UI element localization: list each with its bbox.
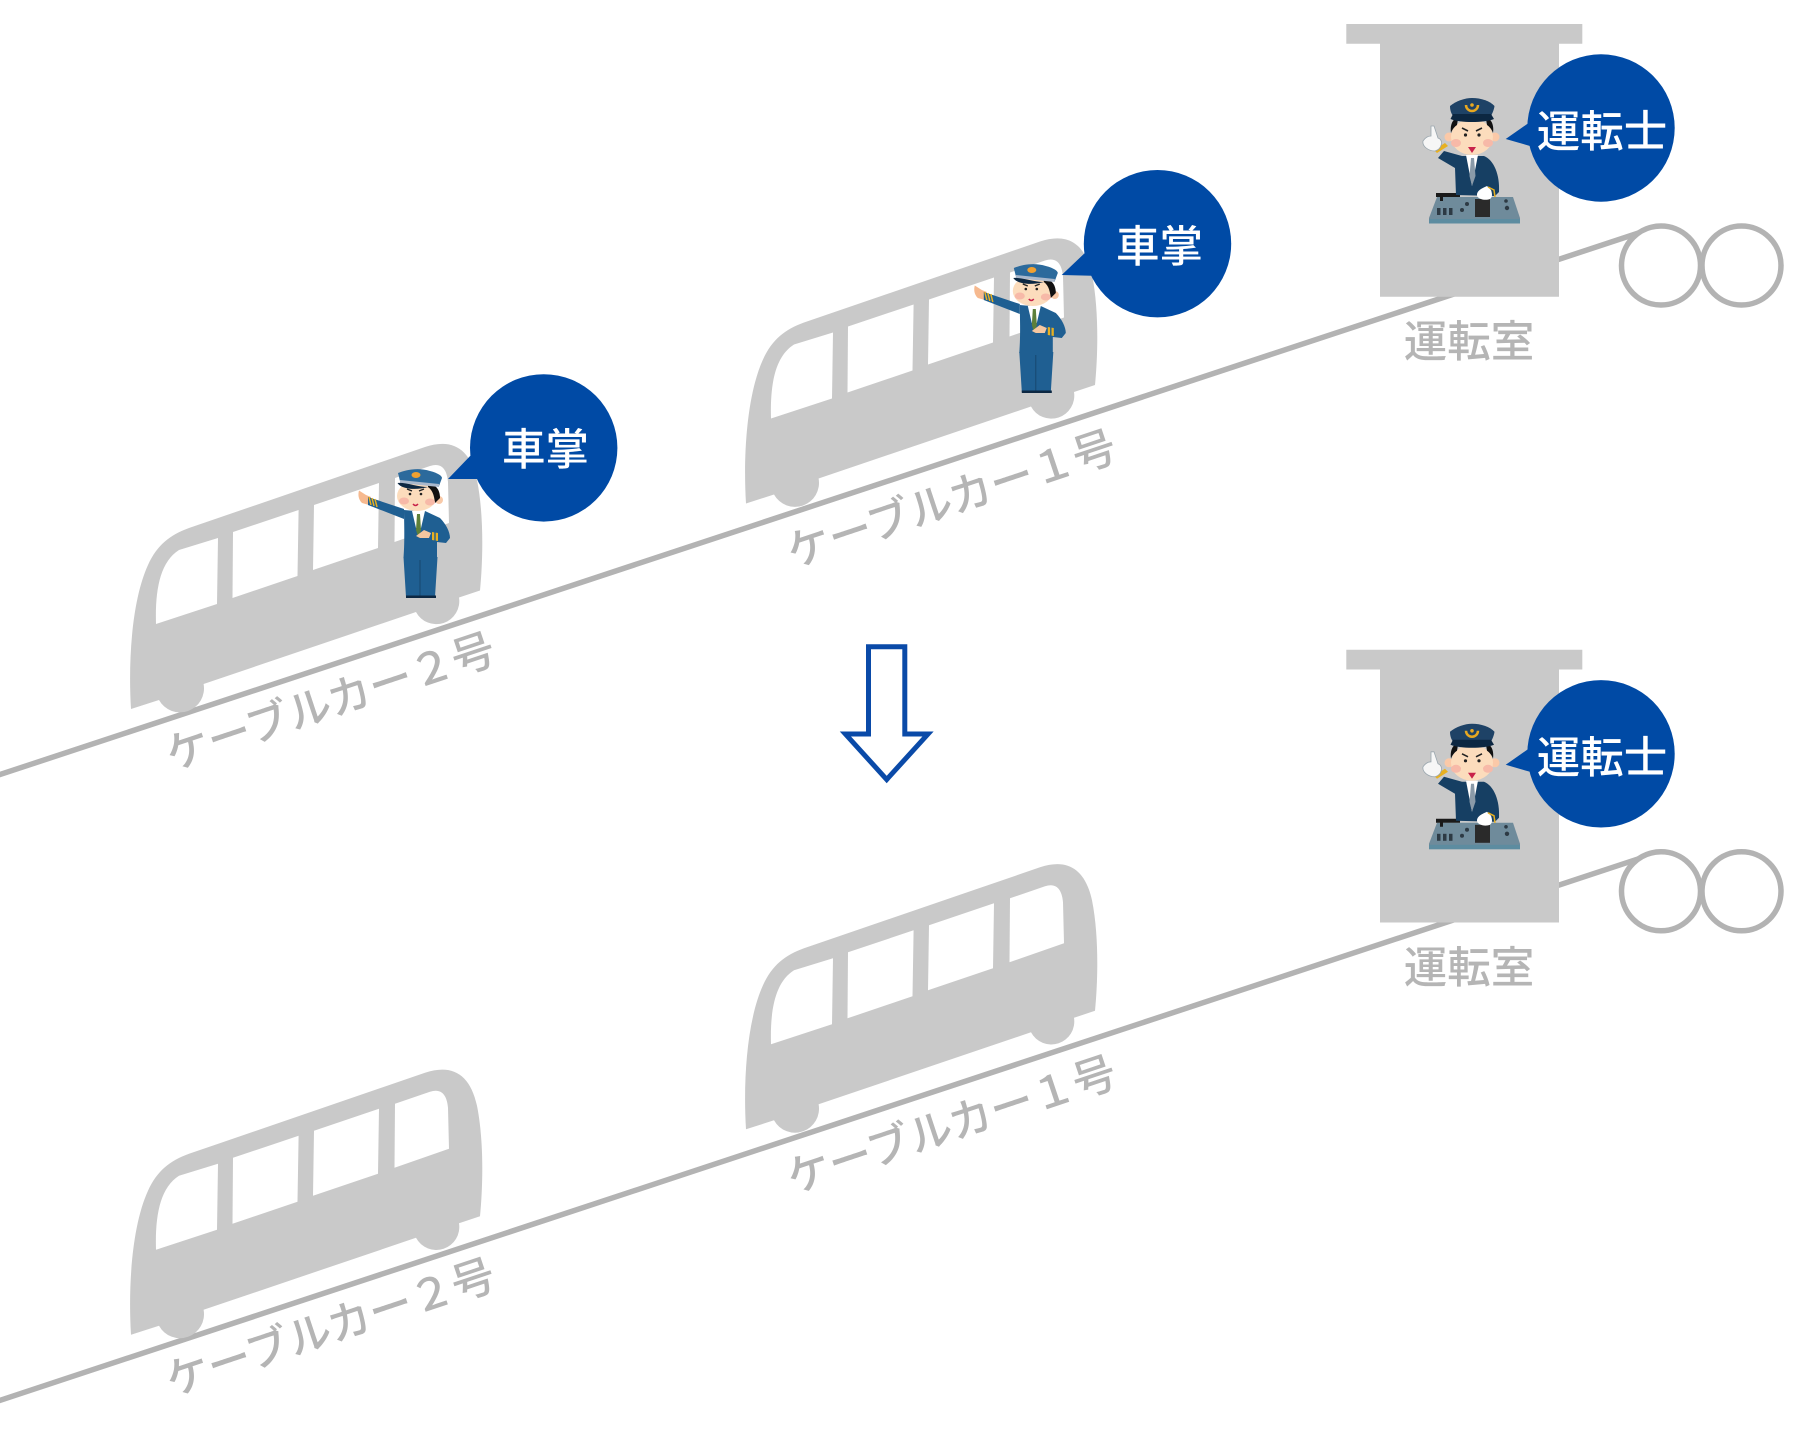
icon: conductor on car 2 [358, 469, 450, 598]
icon: conductor on car 1 [974, 264, 1066, 393]
icon: driver at console [1423, 98, 1520, 224]
control room building [1346, 24, 1582, 297]
cable line [0, 232, 1640, 775]
label: cable car 1: ケーブルカー１号 [781, 423, 1123, 578]
callout: conductor car 2: 車掌 [502, 427, 589, 475]
callout: driver [1506, 54, 1675, 202]
label: cable car 2: ケーブルカー２号 [160, 1251, 502, 1406]
cable car 1 [745, 238, 1097, 507]
arrow: down [845, 647, 928, 780]
label: cable car 1: ケーブルカー１号 [781, 1049, 1123, 1203]
control room building [1346, 650, 1582, 922]
callout: conductor car 1 [1062, 170, 1231, 317]
cable car 1 [745, 864, 1097, 1133]
callout: conductor car 2 [448, 374, 617, 522]
icon: pulley wheels [1622, 226, 1781, 305]
label: cable car 2: ケーブルカー２号 [160, 626, 502, 780]
panel: after (driver only) [0, 650, 1781, 1406]
callout: driver: 運転士 [1537, 109, 1667, 157]
icon: pulley wheels [1622, 852, 1781, 931]
cable line [0, 858, 1640, 1401]
label: control room: 運転室 [1404, 945, 1534, 993]
icon: driver at console [1423, 724, 1520, 849]
label: control room: 運転室 [1404, 319, 1534, 367]
panel: before (cars with conductors) [0, 24, 1781, 780]
callout: driver: 運転士 [1537, 735, 1667, 783]
cable car 2 [130, 444, 482, 712]
callout: conductor car 1: 車掌 [1116, 224, 1203, 272]
callout: driver [1506, 680, 1675, 828]
cable car 2 [130, 1070, 482, 1338]
